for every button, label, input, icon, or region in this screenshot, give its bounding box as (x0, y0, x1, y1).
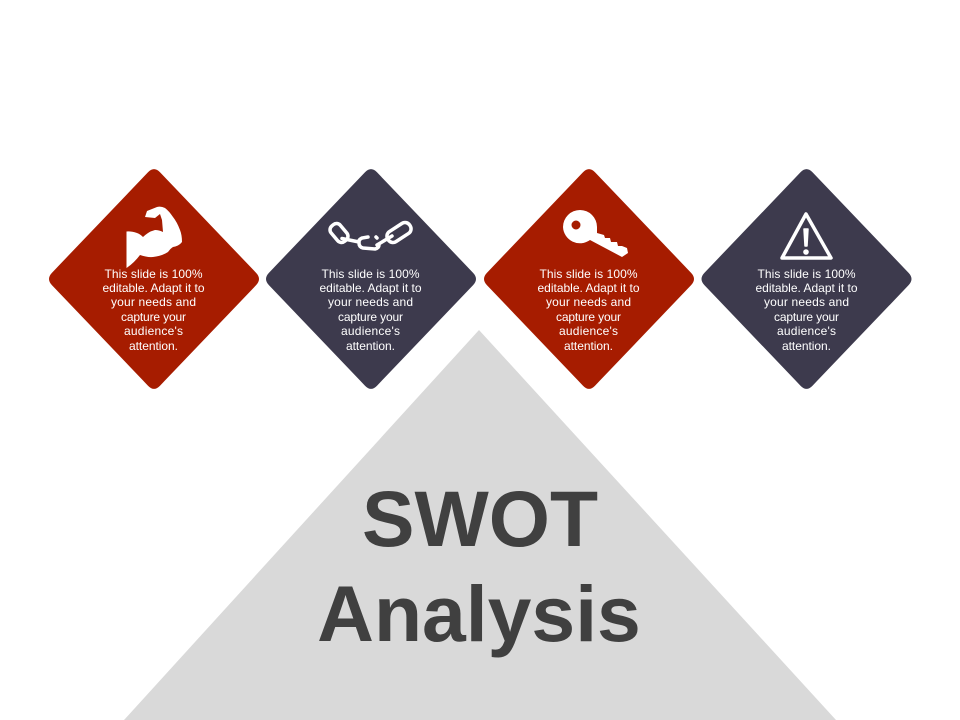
body text (756, 267, 858, 353)
panel: strengths diamond (49, 169, 259, 389)
body text: your needs and (546, 295, 631, 309)
body text: This slide is 100% (540, 267, 638, 281)
body text: capture your (774, 310, 839, 324)
body text: attention. (564, 339, 613, 353)
title (317, 475, 641, 658)
body text: capture your (556, 310, 621, 324)
body text: audience's (341, 324, 400, 338)
body text: editable. Adapt it to (320, 281, 422, 295)
body text (320, 267, 422, 353)
diamond background (49, 169, 259, 389)
body text: your needs and (328, 295, 413, 309)
body text: This slide is 100% (104, 267, 203, 281)
body text (538, 267, 640, 353)
body text: editable. Adapt it to (538, 281, 640, 295)
body text: capture your (121, 310, 186, 324)
icon: warning triangle (782, 214, 831, 258)
panel: threats diamond (702, 169, 912, 389)
body text: attention. (782, 339, 831, 353)
body text: capture your (338, 310, 403, 324)
panel: weaknesses diamond (266, 169, 476, 389)
body text: audience's (124, 324, 183, 338)
icon: key (563, 210, 628, 257)
body text: attention. (129, 339, 178, 353)
title: SWOT (362, 475, 598, 563)
title: Analysis (317, 570, 641, 658)
diamond background (266, 169, 476, 389)
body text: editable. Adapt it to (102, 281, 205, 295)
body text: audience's (777, 324, 836, 338)
body text (102, 267, 205, 353)
body text: attention. (346, 339, 395, 353)
body text: your needs and (764, 295, 849, 309)
body text: your needs and (111, 295, 196, 309)
body text: audience's (559, 324, 618, 338)
grey triangle panel (124, 330, 836, 720)
diamond background (484, 169, 694, 389)
body text: This slide is 100% (758, 267, 856, 281)
body text: editable. Adapt it to (756, 281, 858, 295)
icon: flexed muscle arm (126, 207, 182, 268)
body text: This slide is 100% (322, 267, 420, 281)
panel: opportunities diamond (484, 169, 694, 389)
icon: broken chain (328, 220, 413, 249)
diamond background (702, 169, 912, 389)
